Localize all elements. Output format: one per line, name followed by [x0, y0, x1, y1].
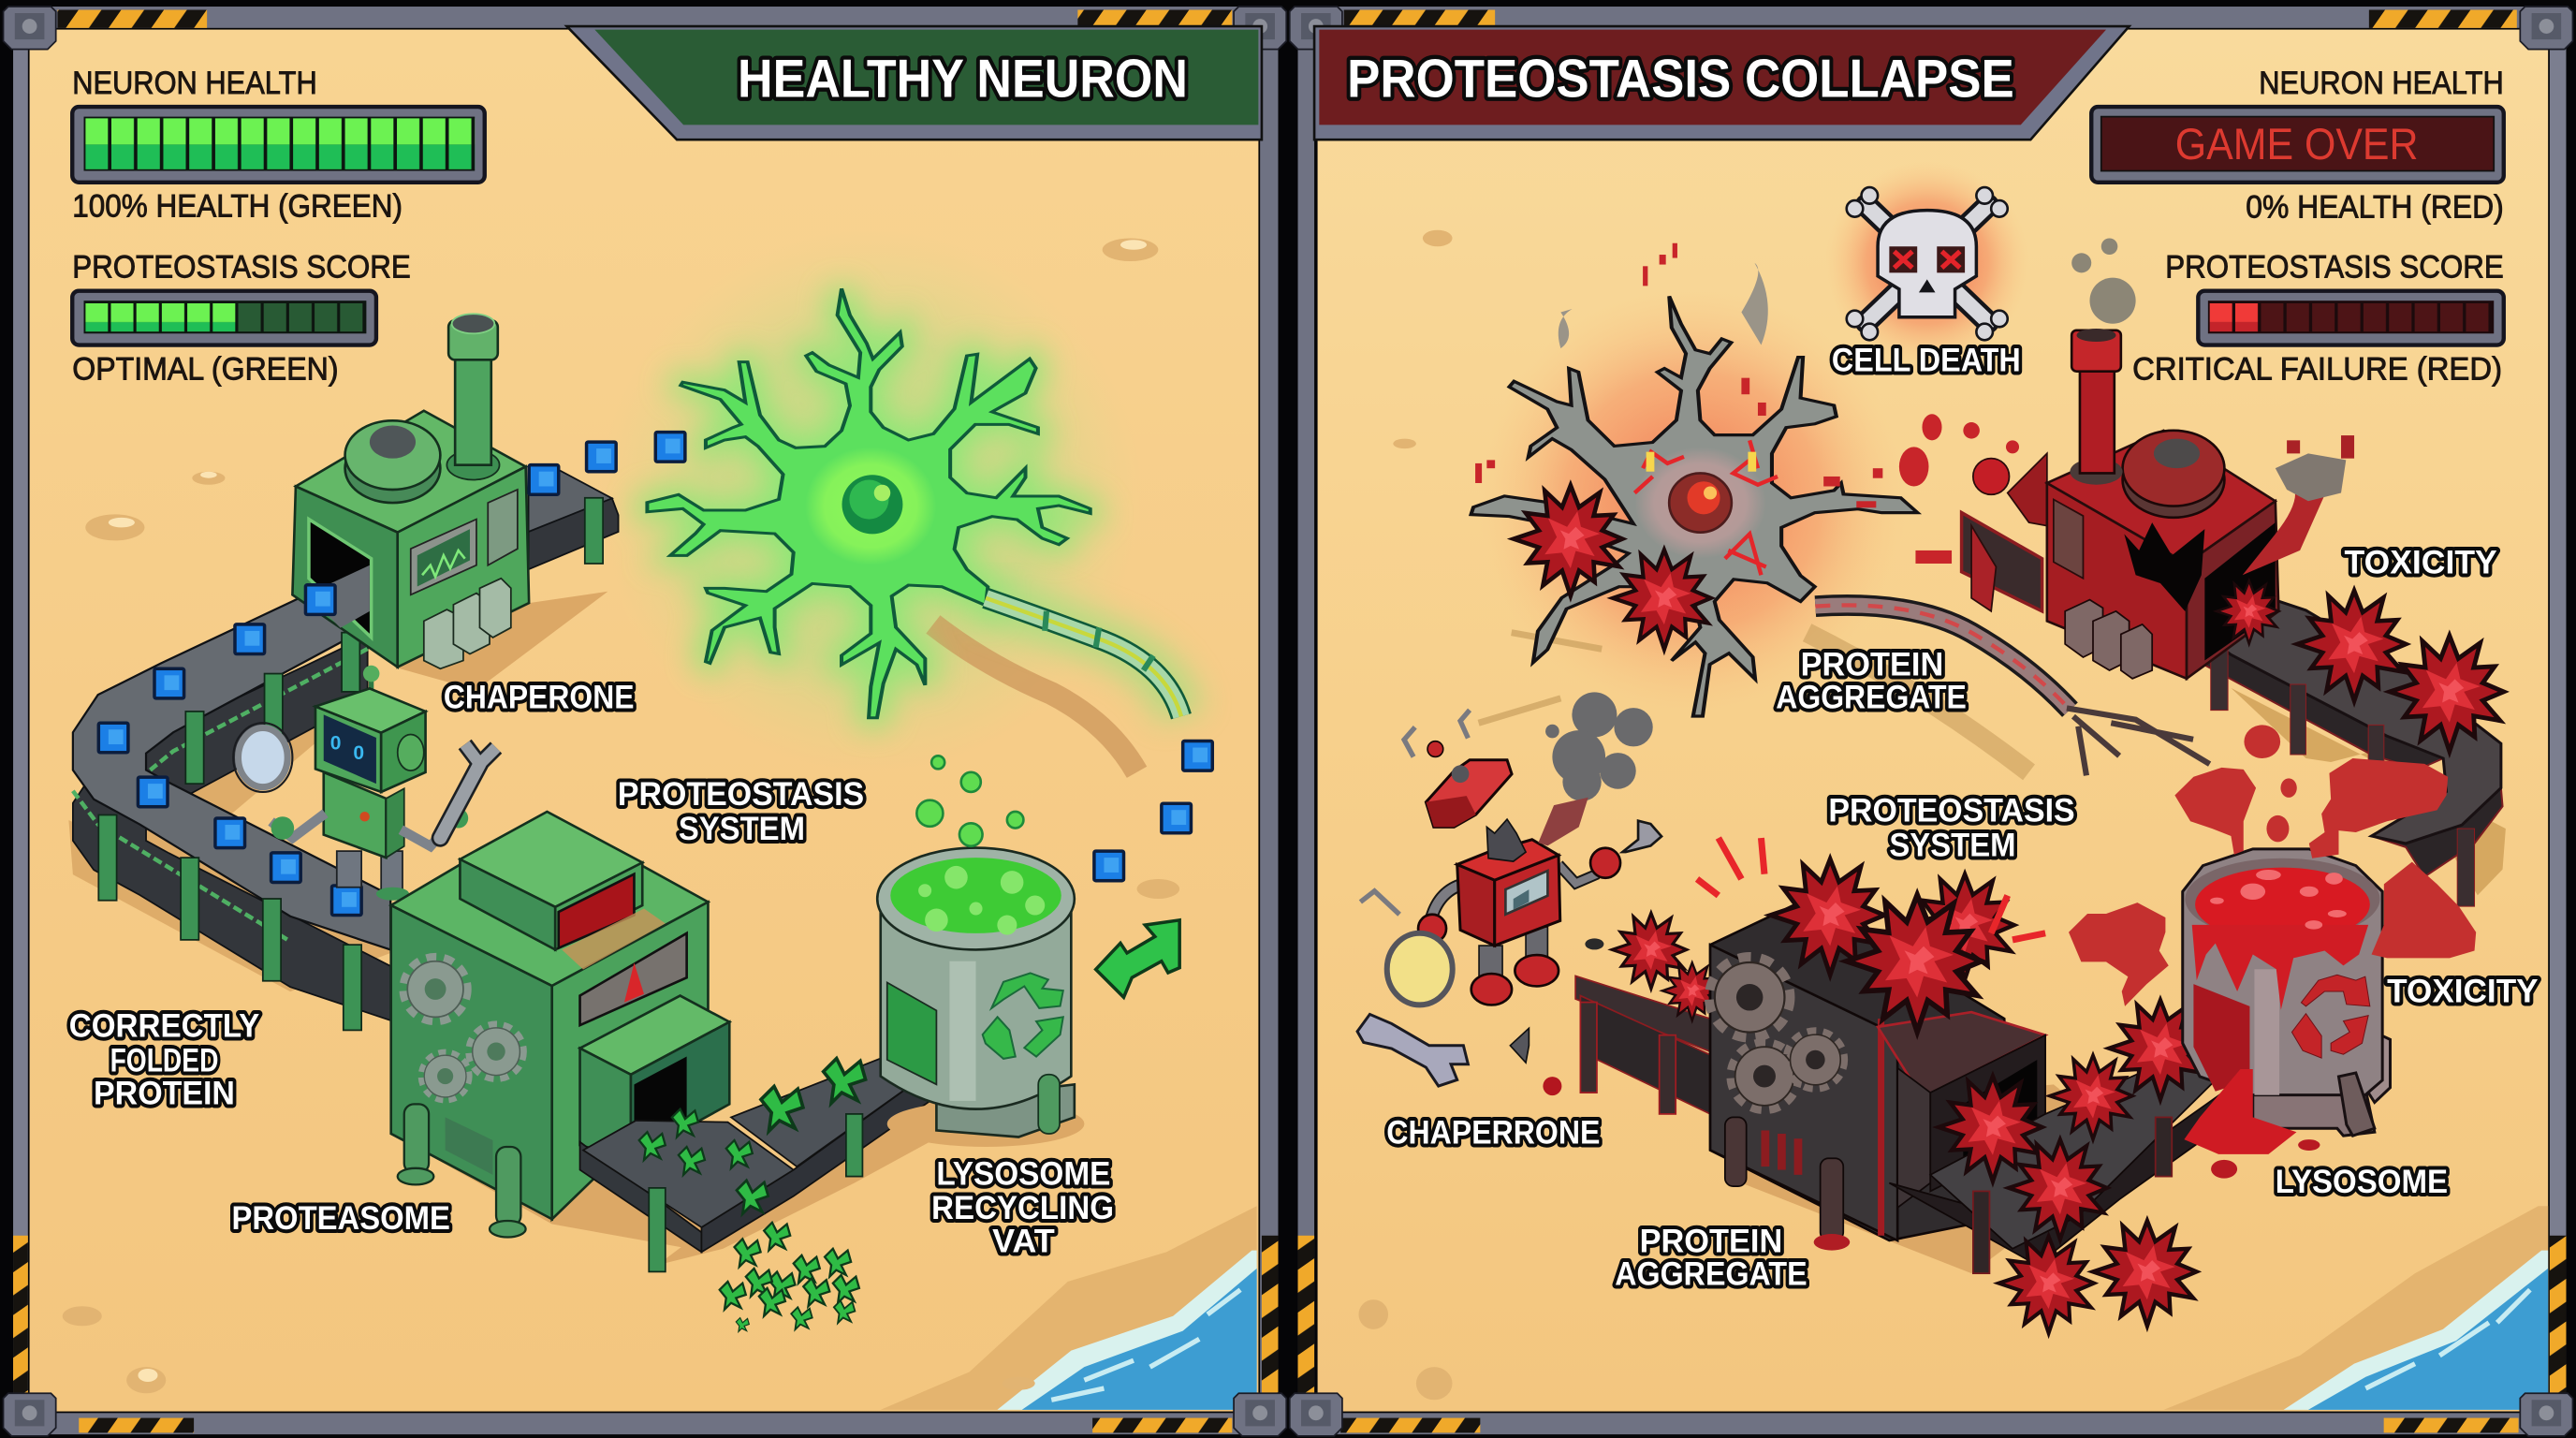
- labels: collapse panel: TOXICITY: [2387, 974, 2539, 1010]
- HUD: game over health bar: NEURON HEALTH: [2259, 66, 2504, 101]
- labels: collapse panel: CHAPERRONE: [1386, 1114, 1600, 1151]
- HUD: game over health bar: 0% HEALTH (RED): [2246, 190, 2504, 226]
- HUD: neuron health: NEURON HEALTH: [72, 66, 317, 101]
- labels: healthy panel: FOLDED: [110, 1042, 218, 1078]
- beach background: [30, 30, 1258, 1412]
- labels: healthy panel: PROTEASOME: [231, 1200, 450, 1237]
- HUD: neuron health: 100% HEALTH (GREEN): [72, 189, 402, 225]
- protein fragments falling: [720, 1223, 859, 1331]
- labels: healthy panel: PROTEOSTASIS: [618, 776, 864, 813]
- chaperone machine: [292, 314, 607, 690]
- chaperone robot: [233, 666, 496, 901]
- conveyor belt: wrecked line: [1962, 453, 2506, 906]
- panel: proteostasis collapse: [1290, 7, 2572, 1436]
- labels: healthy panel: CORRECTLY: [69, 1007, 259, 1044]
- labels: healthy panel: RECYCLING: [931, 1190, 1114, 1226]
- labels: collapse panel: PROTEIN: [1801, 646, 1943, 682]
- lysosome recycling vat: [877, 756, 1084, 1147]
- chaperone robot: 0: [330, 732, 341, 754]
- title: proteostasis collapse: PROTEOSTASIS COLLAPSE: [1347, 50, 2014, 110]
- labels: collapse panel: PROTEOSTASIS: [1828, 793, 2075, 829]
- proteasome machine: [391, 812, 729, 1249]
- labels: healthy panel: VAT: [992, 1223, 1055, 1259]
- recycle arrow: [1096, 920, 1179, 997]
- dying neuron: [1471, 243, 2210, 775]
- panel frame: [1290, 7, 2572, 1436]
- chaperone robot: 0: [353, 742, 364, 764]
- icon: skull and crossbones: [1825, 161, 2029, 365]
- title: healthy neuron: [567, 26, 1262, 139]
- fallen robot head: [1426, 741, 1512, 827]
- aggregates on the wrecked belt: [2217, 580, 2504, 752]
- wrecked belt to lysosome: [1889, 1000, 2234, 1273]
- labels: healthy panel: CHAPERONE: [444, 679, 634, 715]
- labels: collapse panel: PROTEIN: [1640, 1223, 1782, 1259]
- labels: collapse panel: LYSOSOME: [2276, 1164, 2448, 1200]
- conveyor belt: chaperone line: [68, 465, 619, 1030]
- labels: healthy panel: SYSTEM: [679, 811, 805, 847]
- HUD: failing proteostasis score: PROTEOSTASIS SCORE: [2165, 250, 2504, 286]
- HUD: failing proteostasis score: [2132, 250, 2504, 387]
- wrecked proteasome: [1575, 838, 2136, 1273]
- HUD: proteostasis score: PROTEOSTASIS SCORE: [72, 250, 411, 286]
- HUD: failing proteostasis score: CRITICAL FAILURE (RED): [2132, 351, 2502, 387]
- labels: collapse panel: TOXICITY: [2345, 545, 2497, 581]
- labels: collapse panel: SYSTEM: [1889, 827, 2016, 863]
- title: proteostasis collapse: [1314, 26, 2130, 139]
- labels: collapse panel: AGGREGATE: [1776, 679, 1967, 715]
- healthy neuron glow and cell: [600, 230, 1181, 772]
- labels: collapse panel: AGGREGATE: [1615, 1255, 1808, 1292]
- labels: healthy panel: PROTEIN: [94, 1075, 235, 1111]
- conveyor belt: proteasome to vat: [580, 1029, 944, 1271]
- labels: collapse panel: [1386, 343, 2539, 1292]
- HUD: neuron health: [72, 66, 485, 225]
- panel frame: [4, 7, 1286, 1436]
- protein cubes: correctly folded: [97, 431, 1214, 917]
- broken chaperone robot: [1357, 692, 1661, 1095]
- HUD: game over health bar: [2091, 66, 2504, 226]
- HUD: game over health bar: GAME OVER: [2175, 120, 2419, 169]
- collapsed chaperone factory: [2047, 238, 2354, 679]
- panel: healthy neuron: [4, 7, 1286, 1436]
- labels: healthy panel: LYSOSOME: [936, 1155, 1110, 1192]
- title: healthy neuron: HEALTHY NEURON: [738, 50, 1188, 110]
- toxic lysosome vat: [2069, 725, 2476, 1179]
- aggregates on the sand: [1998, 1221, 2197, 1333]
- HUD: proteostasis score: [72, 250, 411, 387]
- beach background: [1318, 30, 2548, 1412]
- HUD: proteostasis score: OPTIMAL (GREEN): [72, 351, 339, 387]
- labels: healthy panel: [69, 679, 1114, 1259]
- labels: collapse panel: CELL DEATH: [1832, 343, 2021, 379]
